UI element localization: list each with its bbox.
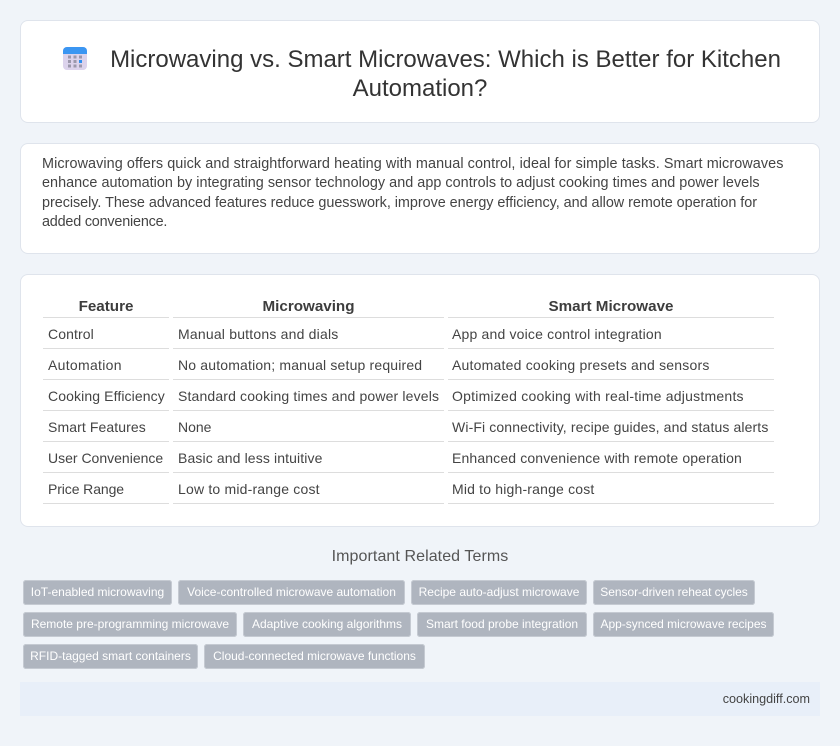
- tags: related terms: Smart food probe integration: [426, 617, 578, 631]
- title: Microwaving vs. Smart Microwaves: Which is Better for Kitchen: [110, 46, 781, 73]
- row: Control: [48, 326, 662, 342]
- row: User Convenience: [48, 450, 742, 466]
- title: [110, 46, 781, 102]
- row: User Convenience: Enhanced convenience with remote operation: [452, 450, 742, 466]
- icon: calendar grid: [63, 47, 87, 70]
- row: Cooking Efficiency: Cooking Efficiency: [48, 388, 165, 404]
- text block: summary: precisely. These advanced features reduce guesswork, improve energy efficiency, and allow remote operation for: [42, 195, 757, 211]
- text block: summary: Microwaving offers quick and straightforward heating with manual control, ideal for simple tasks. Smart microwaves: [42, 156, 783, 172]
- text block: summary: [42, 156, 783, 230]
- tags: related terms: Cloud-connected microwave functions: [213, 649, 416, 663]
- row: Smart Features: [48, 419, 768, 435]
- table header: Smart Microwave: Smart Microwave: [549, 298, 673, 315]
- row: Smart Features: Smart Features: [48, 419, 146, 435]
- row: Price Range: Low to mid-range cost: [178, 481, 320, 497]
- footer: site name: cookingdiff.com: [723, 692, 810, 706]
- row: Control: App and voice control integration: [452, 326, 662, 342]
- row: Control: Control: [48, 326, 94, 342]
- title: Automation?: [353, 75, 487, 102]
- row: Smart Features: None: [178, 419, 211, 435]
- table header: Feature: Feature: [79, 298, 133, 315]
- row: Price Range: [48, 481, 594, 497]
- panel: summary card: [20, 143, 820, 254]
- tags: related terms: IoT-enabled microwaving: [31, 585, 164, 599]
- row: Control: Manual buttons and dials: [178, 326, 338, 342]
- tags: related terms: Remote pre-programming microwave: [31, 617, 229, 631]
- row: Cooking Efficiency: Optimized cooking with real-time adjustments: [452, 388, 744, 404]
- footer bar: [20, 682, 820, 716]
- row: User Convenience: User Convenience: [48, 450, 163, 466]
- tags: related terms: RFID-tagged smart containers: [30, 649, 191, 663]
- row: Smart Features: Wi-Fi connectivity, recipe guides, and status alerts: [452, 419, 768, 435]
- tags: related terms: Adaptive cooking algorithms: [252, 617, 402, 631]
- text block: summary: added convenience.: [42, 214, 167, 230]
- table header: Microwaving: Microwaving: [262, 298, 354, 315]
- row: User Convenience: Basic and less intuitive: [178, 450, 323, 466]
- row: Automation: Automation: [48, 357, 122, 373]
- row: Price Range: Price Range: [48, 481, 124, 497]
- comparison table: [43, 317, 774, 504]
- text block: summary: enhance automation by integrating sensor technology and app controls to adjust cooking times and power levels: [42, 175, 760, 191]
- panel: comparison table card: [20, 274, 820, 527]
- row: Cooking Efficiency: [48, 388, 744, 404]
- row: Automation: Automated cooking presets and sensors: [452, 357, 710, 373]
- row: Cooking Efficiency: Standard cooking times and power levels: [178, 388, 439, 404]
- row: Automation: [48, 357, 710, 373]
- tags: related terms: Voice-controlled microwave automation: [187, 585, 396, 599]
- row: Automation: No automation; manual setup required: [178, 357, 422, 373]
- tags: related terms: [23, 580, 774, 669]
- panel: title card: [20, 20, 820, 123]
- tags: related terms: Recipe auto-adjust microwave: [419, 585, 579, 599]
- tags: related terms: Sensor-driven reheat cycles: [600, 585, 748, 599]
- heading: Important Related Terms: Important Related Terms: [332, 548, 508, 565]
- row: Price Range: Mid to high-range cost: [452, 481, 594, 497]
- tags: related terms: App-synced microwave recipes: [600, 617, 767, 631]
